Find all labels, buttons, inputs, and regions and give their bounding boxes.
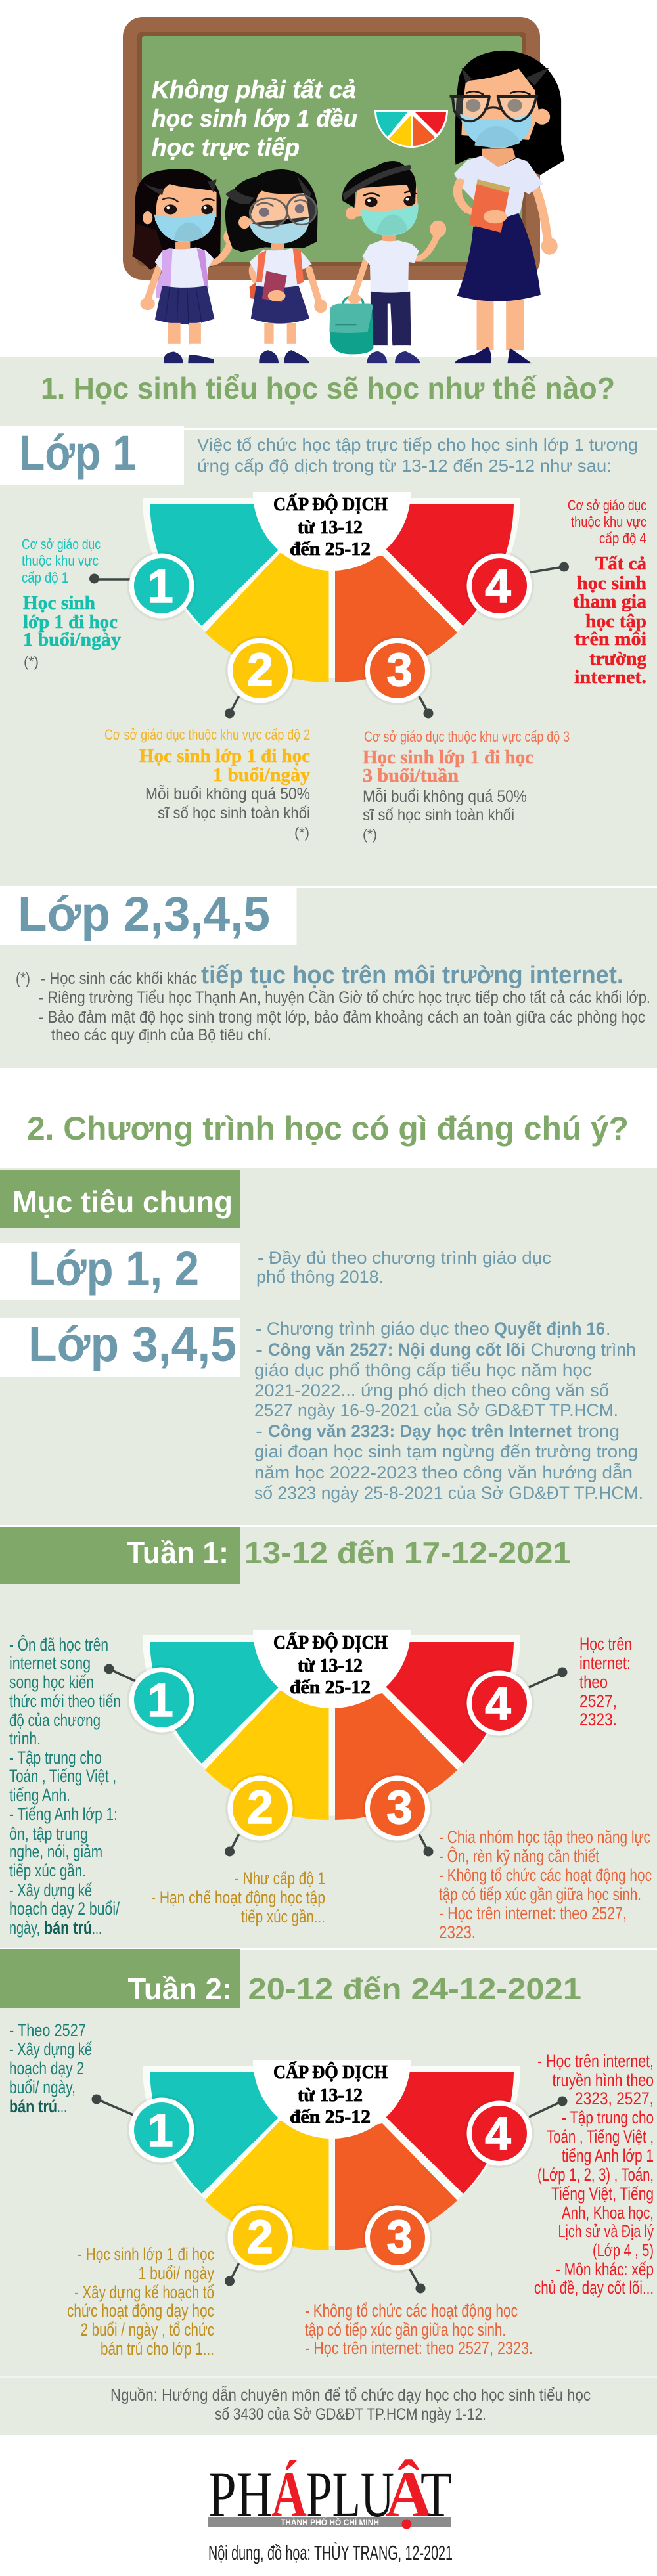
text: week 1 level 2: - Hạn chế hoạt động học tập — [151, 1888, 325, 1907]
text: week 2 level 1: ... — [57, 2097, 67, 2116]
text: level 1 callout: (*) — [24, 654, 39, 670]
illustration: boy with green bag — [329, 161, 446, 363]
text: week 2 level 1: buổi/ ngày, — [9, 2077, 76, 2097]
text: week 1 level 4: 2323. — [579, 1710, 617, 1729]
text: week 1 level 4: 2527, — [579, 1691, 617, 1711]
text: week 1 level 3: - Ôn, rèn kỹ năng cần thiết — [439, 1846, 599, 1866]
gauge centre label — [273, 2062, 388, 2127]
text block: Lớp 3,4,5 goals — [254, 1319, 643, 1503]
illustration: girl with purple backpack — [132, 169, 238, 363]
text: week 2 level 1: - Xây dựng kế — [9, 2039, 92, 2059]
text: level 1 callout: thuộc khu vực — [22, 552, 99, 569]
text: week 2 level 1: - Theo 2527 — [9, 2020, 86, 2040]
heading: week 1 — [0, 1527, 571, 1584]
gauge centre label — [273, 494, 388, 560]
text: week 1 level 1: internet song — [9, 1653, 91, 1673]
background band: section 1 — [0, 357, 657, 1068]
text: week 1 level 1: - Ôn đã học trên — [9, 1634, 108, 1654]
hero title: học sinh lớp 1 đều — [152, 105, 357, 132]
text: week 1 level 4: internet: — [579, 1653, 631, 1673]
text: level 3 callout: sĩ số học sinh toàn khối — [363, 806, 514, 824]
icon: four-colour gauge — [374, 110, 448, 148]
text block: Lớp 1, 2 goals: - Đầy đủ theo chương trình giáo dục — [258, 1248, 551, 1268]
illustration: girl with glasses and book — [225, 169, 327, 363]
heading: week 1: Tuần 1: — [127, 1536, 229, 1570]
badge 2 with pin: 2 — [247, 644, 273, 696]
gauge centre label: đến 25-12 — [290, 2107, 371, 2127]
panel: Lớp 1 label: Lớp 1 — [19, 426, 136, 480]
text: week 1 level 1: hoạch dạy 2 buổi/ — [9, 1899, 120, 1919]
heading: section 2: 2. Chương trình học có gì đáng chú ý? — [27, 1110, 629, 1147]
text: level 1 callout: Học sinh — [23, 593, 95, 613]
illustration: teacher with book — [449, 51, 564, 363]
text: week 1 level 1: độ của chương — [9, 1710, 101, 1730]
text block: Lớp 3,4,5 goals: Quyết định 16 — [494, 1319, 605, 1339]
badge 3 with pin: 3 — [386, 644, 413, 696]
text block: Lớp 3,4,5 goals: trong — [578, 1421, 620, 1441]
text: level 2 callout: Mỗi buổi không quá 50% — [145, 784, 310, 803]
text: level 2 callout: Học sinh lớp 1 đi học — [139, 746, 310, 766]
badge 4 with pin: 4 — [485, 2108, 511, 2160]
logo: Pháp Luật TP.HCM: Ậ — [385, 2458, 432, 2531]
gauge centre label: từ 13-12 — [298, 1656, 363, 1676]
badge 1 with pin: 1 — [147, 2105, 173, 2157]
text block: other grades note: theo các quy định của Bộ tiêu chí. — [51, 1026, 271, 1044]
text: week 2 level 2: bán trú cho lớp 1... — [101, 2339, 214, 2359]
badge 2 with pin: 2 — [247, 2211, 273, 2263]
hero illustration: chalkboard — [123, 17, 540, 280]
text block: Lớp 3,4,5 goals: giai đoạn học sinh tạm ngừng đến trường trong — [254, 1442, 638, 1461]
text: level 3 callout: Mỗi buổi không quá 50% — [363, 787, 527, 806]
text: week 1 level 1: ngày, — [9, 1918, 40, 1938]
text block: Lớp 1 intro — [197, 435, 638, 476]
text block: Lớp 3,4,5 goals: Công văn 2323: Dạy học trên Internet — [268, 1421, 572, 1441]
gauge centre label: CẤP ĐỘ DỊCH — [273, 1632, 388, 1653]
text: level 1 callout: Cơ sở giáo dục — [22, 536, 101, 552]
text: week 1 level 1 — [9, 1634, 121, 1938]
background band: section 2 — [0, 1168, 657, 2435]
logo: Pháp Luật TP.HCM: PH — [208, 2458, 273, 2531]
heading: week 2: Tuần 2: — [127, 1972, 232, 2006]
badge 4 with pin — [464, 551, 569, 621]
gauge centre label: đến 25-12 — [290, 1677, 371, 1698]
text: level 1 callout — [22, 536, 121, 670]
text: level 4 callout: trên môi — [574, 629, 646, 650]
logo: Pháp Luật TP.HCM: Á — [271, 2458, 307, 2531]
badge 2 with pin — [225, 636, 295, 719]
text: level 3 callout: (*) — [363, 826, 377, 843]
badge 1 with pin — [92, 2094, 196, 2165]
hero title: Không phải tất cả — [152, 76, 356, 103]
text block: Lớp 3,4,5 goals: Công văn 2527: Nội dung cốt lõi — [268, 1340, 526, 1360]
text: level 4 callout: học tập — [585, 611, 646, 632]
text: week 1 level 1: bán trú — [44, 1918, 92, 1938]
text block: Lớp 3,4,5 goals: - — [256, 1340, 263, 1360]
text: level 2 callout: 1 buổi/ngày — [213, 765, 310, 786]
badge 2 with pin: 2 — [247, 1782, 273, 1834]
text block: other grades note: (*) — [16, 969, 30, 988]
text: week 2 level 1 — [9, 2020, 92, 2116]
text block: Lớp 3,4,5 goals: . — [606, 1319, 611, 1339]
text: week 2 level 2: chức hoạt động dạy học — [67, 2301, 214, 2321]
text: level 4 callout: trường — [589, 649, 646, 669]
logo: Pháp Luật TP.HCM: THÀNH PHỐ HỒ CHÍ MINH — [281, 2518, 379, 2527]
text block: source: số 3430 của Sở GD&ĐT TP.HCM ngày 1-12. — [215, 2405, 486, 2424]
badge 1 with pin: 1 — [147, 561, 173, 613]
panel: Lớp 1, 2 label: Lớp 1, 2 — [28, 1241, 199, 1296]
text block: Lớp 3,4,5 goals: số 2323 ngày 25-8-2021 của Sở GD&ĐT TP.HCM. — [254, 1483, 643, 1503]
text: week 1 level 2: tiếp xúc gần... — [241, 1907, 325, 1926]
panel: Lớp 1 label — [0, 426, 184, 485]
text: level 3 callout: Học sinh lớp 1 đi học — [363, 747, 533, 768]
text: level 4 callout: cấp độ 4 — [599, 530, 646, 546]
text: week 1 level 2 — [151, 1869, 325, 1926]
text: level 2 callout: (*) — [294, 824, 309, 841]
text block: Lớp 1 intro: ứng cấp độ dịch trong từ 13-12 đến 25-12 như sau: — [197, 456, 612, 476]
text: week 1 level 1: ôn, tập trung — [9, 1824, 88, 1844]
badge 3 with pin — [363, 2203, 432, 2294]
text: week 2 level 1: bán trú — [9, 2097, 57, 2116]
badge 2 with pin — [225, 1773, 295, 1856]
text: week 1 level 3: 2323. — [439, 1922, 476, 1942]
text: week 1 level 3 — [439, 1827, 652, 1942]
badge 4 with pin: 4 — [485, 561, 511, 613]
text: level 3 callout — [363, 728, 570, 843]
text: week 2 level 4 — [534, 2051, 654, 2298]
text: week 1 level 1: nghe, nói, giảm — [9, 1842, 102, 1861]
panel: Mục tiêu chung heading: Mục tiêu chung — [12, 1185, 233, 1219]
panel: Mục tiêu chung heading — [0, 1170, 240, 1228]
text: level 1 callout: cấp độ 1 — [22, 569, 68, 586]
text block: other grades note: tiếp tục học trên môi trường internet. — [201, 962, 623, 989]
text: level 2 callout: Cơ sở giáo dục thuộc khu vực cấp độ 2 — [104, 726, 310, 743]
text block: Lớp 3,4,5 goals: giáo dục phổ thông cấp tiểu học năm học — [254, 1360, 592, 1380]
logo: Pháp Luật TP.HCM: PLU — [306, 2458, 394, 2531]
heading: week 2 — [0, 1949, 581, 2008]
gauge centre label: từ 13-12 — [298, 2085, 363, 2106]
text: level 1 callout: 1 buổi/ngày — [23, 630, 121, 650]
badge 3 with pin: 3 — [386, 2211, 413, 2263]
hero title: học trực tiếp — [152, 134, 300, 161]
text: week 1 level 1: ... — [92, 1918, 102, 1938]
text block: Lớp 3,4,5 goals: 2527 ngày 16-9-2021 của Sở GD&ĐT TP.HCM. — [254, 1400, 618, 1420]
badge 3 with pin: 3 — [386, 1782, 413, 1834]
gauge centre label: đến 25-12 — [290, 539, 371, 560]
text: level 4 callout — [568, 497, 646, 688]
gauge centre label: CẤP ĐỘ DỊCH — [273, 2062, 388, 2083]
heading: section 1: 1. Học sinh tiểu học sẽ học như thế nào? — [41, 371, 615, 405]
badge 1 with pin: 1 — [147, 1675, 173, 1727]
text block: Lớp 3,4,5 goals: - — [256, 1421, 263, 1441]
text: level 4 callout: tham gia — [573, 592, 646, 612]
text block: Lớp 3,4,5 goals: - Chương trình giáo dục theo — [256, 1319, 489, 1339]
text: level 1 callout: lớp 1 đi học — [23, 612, 118, 633]
text: week 2 level 2: - Học sinh lớp 1 đi học — [78, 2244, 214, 2264]
heading: week 1: 13-12 đến 17-12-2021 — [244, 1536, 571, 1570]
gauge centre label: từ 13-12 — [298, 518, 363, 538]
gauge centre label — [273, 1632, 388, 1698]
text: week 1 level 1: Toán , Tiếng Việt , — [9, 1766, 116, 1786]
text: week 1 level 1: - Tập trung cho — [9, 1748, 102, 1767]
badge 4 with pin — [464, 2097, 568, 2168]
chart: epidemic level gauge, week 1 — [104, 1630, 568, 1856]
text: week 2 level 2 — [67, 2244, 214, 2359]
badge 2 with pin — [225, 2203, 295, 2286]
text block: Lớp 1, 2 goals — [256, 1248, 551, 1287]
text: level 3 callout: Cơ sở giáo dục thuộc khu vực cấp độ 3 — [364, 728, 570, 745]
badge 1 with pin — [89, 551, 196, 621]
text: week 1 level 1: trình. — [9, 1729, 41, 1748]
text: week 1 level 1: - Tiếng Anh lớp 1: — [9, 1804, 118, 1824]
text: week 2 level 3: - Học trên internet: theo 2527, 2323. — [305, 2338, 533, 2358]
text block: source: Nguồn: Hướng dẫn chuyên môn để tổ chức dạy học cho học sinh tiểu học — [110, 2386, 591, 2405]
text: level 2 callout: sĩ số học sinh toàn khối — [158, 804, 310, 822]
logo: Pháp Luật TP.HCM: T — [420, 2458, 452, 2531]
panel: Lớp 3,4,5 label: Lớp 3,4,5 — [28, 1317, 237, 1371]
text block: Lớp 1 intro: Việc tổ chức học tập trực tiếp cho học sinh lớp 1 tương — [197, 435, 638, 455]
text: level 3 callout: 3 buổi/tuần — [363, 766, 459, 786]
text block: Lớp 3,4,5 goals: Chương trình — [531, 1340, 636, 1360]
heading: week 2: 20-12 đến 24-12-2021 — [248, 1972, 581, 2006]
text: week 1 level 1: - Xây dựng kế — [9, 1880, 92, 1900]
text: week 1 level 4: Học trên — [579, 1634, 632, 1654]
text: week 1 level 4 — [579, 1634, 632, 1729]
text: level 4 callout: học sinh — [577, 573, 646, 594]
text: week 2 level 3: tập có tiếp xúc gần giữa học sinh. — [305, 2320, 506, 2340]
badge 3 with pin — [363, 1773, 434, 1856]
text block: other grades note — [16, 962, 650, 1044]
text: week 2 level 2: - Xây dựng kế hoạch tổ — [74, 2282, 214, 2302]
text: week 2 level 3: - Không tổ chức các hoạt động học — [305, 2301, 518, 2321]
chart: epidemic level gauge, Lớp 1 — [89, 492, 569, 719]
text: week 2 level 2: 1 buổi/ ngày — [138, 2263, 214, 2283]
gauge centre label: CẤP ĐỘ DỊCH — [273, 494, 388, 515]
panel: Lớp 2,3,4,5 label: Lớp 2,3,4,5 — [18, 887, 270, 941]
chart: epidemic level gauge, week 2 — [92, 2060, 568, 2294]
text block: other grades note: - Học sinh các khối khác — [41, 969, 197, 988]
text: week 1 level 4: theo — [579, 1672, 608, 1692]
text block: Lớp 3,4,5 goals: năm học 2022-2023 theo công văn hướng dẫn — [254, 1462, 633, 1482]
text: week 1 level 1: tiếp xúc gần. — [9, 1861, 86, 1880]
text: week 2 level 2: 2 buổi / ngày , tổ chức — [80, 2320, 214, 2340]
logo: Pháp Luật TP.HCM — [208, 2458, 452, 2531]
text: level 4 callout: internet. — [574, 667, 646, 688]
text: week 1 level 1: thức mới theo tiến — [9, 1691, 121, 1711]
text block: Lớp 1, 2 goals: phổ thông 2018. — [256, 1267, 384, 1287]
badge 3 with pin — [363, 636, 434, 719]
badge 1 with pin — [104, 1664, 196, 1735]
text block: Lớp 3,4,5 goals: 2021-2022... ứng phó dịch theo công văn số — [254, 1381, 609, 1400]
text: week 2 level 1: hoạch dạy 2 — [9, 2058, 84, 2078]
hero title — [152, 76, 357, 161]
text block: source — [110, 2386, 591, 2424]
text: week 1 level 1: song học kiến — [9, 1672, 94, 1692]
credit line: Nội dung, đồ họa: THÙY TRANG, 12-2021 — [208, 2541, 453, 2564]
badge 4 with pin — [464, 1667, 568, 1738]
text: level 2 callout — [104, 726, 310, 841]
badge 4 with pin: 4 — [485, 1678, 511, 1730]
text: week 1 level 1: tiếng Anh. — [9, 1785, 70, 1805]
text: week 2 level 3 — [305, 2301, 533, 2358]
text: level 4 callout: Tất cả — [595, 554, 646, 574]
text: week 1 level 2: - Như cấp độ 1 — [235, 1869, 325, 1888]
